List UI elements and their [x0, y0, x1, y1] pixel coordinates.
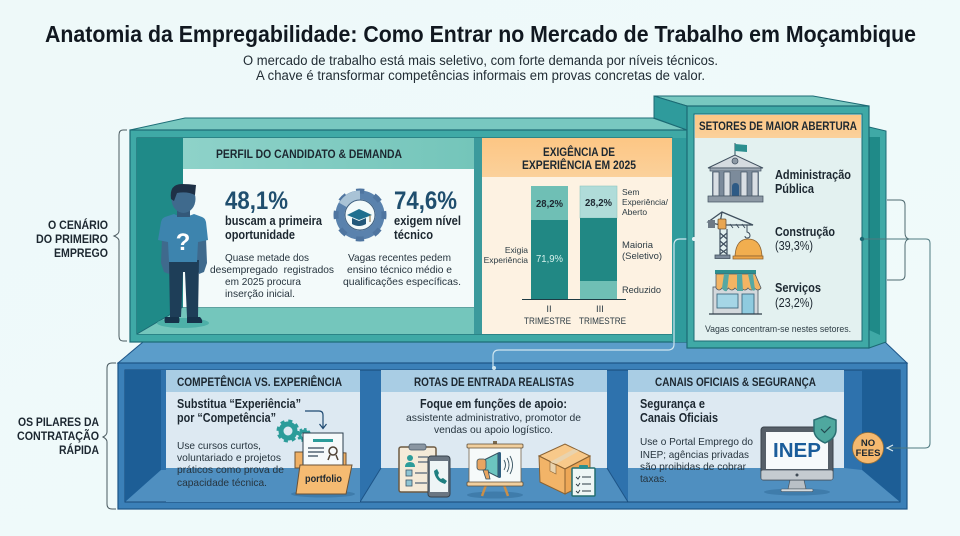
text: administração pública: Administração — [775, 168, 851, 182]
body text: vagas recentes: Vagas recentes pedem — [348, 252, 451, 264]
chart: stacked bars: TRIMESTRE — [579, 316, 626, 327]
heading: canais: CANAIS OFICIAIS & SEGURANÇA — [655, 377, 816, 389]
body text: quase metade — [210, 252, 334, 300]
panel: exigência de experiência — [474, 138, 672, 334]
chart: stacked bars: Experiência — [484, 255, 528, 265]
icon: gear with graduation cap — [336, 191, 384, 239]
subheading: segurança — [640, 397, 718, 425]
heading: exigência — [522, 146, 637, 172]
body text: vagas recentes: ensino técnico médio e — [347, 264, 452, 276]
chart: stacked bars: 71,9% — [536, 254, 563, 265]
stat: 74,6%: técnico — [394, 228, 433, 242]
icon: presentation board with megaphone — [467, 441, 523, 498]
caption: vagas concentram-se: Vagas concentram-se nestes setores. — [705, 324, 851, 335]
text: serviços — [775, 281, 821, 310]
body text: quase metade: desempregado registrados — [210, 264, 334, 276]
subheading: segurança: Canais Oficiais — [640, 411, 718, 425]
body text: portal emprego — [640, 436, 753, 485]
body text: cursos curtos: Use cursos curtos, — [177, 440, 261, 452]
subtitle: A chave é transformar competências informais em provas concretas de valor. — [256, 68, 705, 83]
body text: vagas recentes — [343, 252, 461, 288]
panel: setores de maior abertura — [654, 96, 886, 348]
subheading: substitua: Substitua “Experiência” — [177, 397, 301, 411]
panel: competência vs experiência — [166, 370, 360, 502]
body text: funções de apoio — [406, 412, 581, 436]
heading: perfil: PERFIL DO CANDIDATO & DEMANDA — [216, 149, 402, 161]
text: construção: Construção — [775, 225, 835, 239]
chart: stacked bars: Experiência/ — [622, 197, 669, 207]
icon: clipboard and phone — [399, 444, 450, 497]
text: administração pública: Pública — [775, 182, 815, 196]
body text: quase metade: em 2025 procura — [225, 276, 301, 288]
icon: cardboard box with checklist — [539, 444, 595, 496]
body text: cursos curtos: capacidade técnica. — [177, 477, 267, 489]
subtitle — [243, 53, 718, 83]
stat: 74,6%: 74,6% — [394, 187, 457, 215]
callout: no fees badge: NO — [861, 438, 875, 449]
subheading: substitua — [177, 397, 301, 425]
label: o cenário do primeiro emprego: O CENÁRIO — [48, 219, 108, 232]
stat: 74,6% — [394, 187, 461, 242]
chart: stacked bars: Reduzido — [622, 285, 661, 296]
body text: quase metade: Quase metade dos — [225, 252, 309, 264]
body text: quase metade: inserção inicial. — [225, 288, 295, 300]
stat: 48,1%: oportunidade — [225, 228, 295, 242]
heading: competência: COMPETÊNCIA VS. EXPERIÊNCIA — [177, 376, 342, 389]
body text: portal emprego: INEP; agências privadas — [640, 449, 749, 461]
label: os pilares da contratação rápida: OS PILARES DA — [18, 417, 99, 429]
icon: computer with INEP logo and shield — [761, 416, 836, 496]
callout: no fees badge — [852, 432, 884, 464]
body text: portal emprego: taxas. — [640, 473, 667, 485]
arrow: connector from sectors to rotas de entrada — [492, 239, 694, 370]
chart: stacked bars: III — [596, 304, 604, 315]
icon: construction crane and helmet — [708, 212, 763, 259]
stat: 48,1%: buscam a primeira — [225, 214, 323, 228]
icon: government building — [708, 143, 763, 202]
icon: computer with INEP logo and shield: INEP — [773, 440, 821, 462]
text: serviços: Serviços — [775, 281, 821, 295]
heading: setores: SETORES DE MAIOR ABERTURA — [699, 121, 857, 133]
stat: 48,1%: 48,1% — [225, 187, 288, 215]
subheading: foque: Foque em funções de apoio: — [420, 397, 567, 411]
panel: blue lower box — [118, 342, 907, 509]
heading: rotas: ROTAS DE ENTRADA REALISTAS — [414, 377, 574, 389]
panel: canais oficiais — [628, 370, 844, 496]
panel: teal upper box — [130, 118, 687, 342]
body text: cursos curtos: voluntariado e projetos — [177, 452, 281, 464]
body text: funções de apoio: assistente administrativo, promotor de — [406, 412, 581, 424]
text: construção — [775, 225, 835, 253]
icon: candidate silhouette — [157, 184, 209, 328]
subheading: substitua: por “Competência” — [177, 411, 276, 425]
label: os pilares da contratação rápida: CONTRATAÇÃO — [17, 430, 99, 443]
dot: connector start — [692, 237, 696, 241]
label: o cenário do primeiro emprego: EMPREGO — [54, 248, 108, 260]
label: o cenário do primeiro emprego — [36, 130, 127, 341]
text: administração pública — [775, 168, 851, 196]
panel: rotas de entrada — [381, 370, 607, 498]
chart: stacked bars: 28,2% — [585, 198, 612, 209]
text: construção: (39,3%) — [775, 239, 813, 253]
chart: stacked bars: 28,2% — [536, 199, 563, 210]
panel: perfil do candidato — [157, 138, 474, 328]
icon: candidate silhouette: ? — [176, 229, 190, 256]
chart: stacked bars: (Seletivo) — [622, 251, 662, 262]
icon: storefront — [709, 270, 762, 314]
text: serviços: (23,2%) — [775, 296, 813, 310]
title: Anatomia da Empregabilidade: Como Entrar no Mercado de Trabalho em Moçambique — [45, 21, 916, 47]
label: o cenário do primeiro emprego: DO PRIMEIRO — [36, 234, 108, 246]
icon: portfolio folder with gears — [278, 411, 355, 498]
stat: 48,1% — [225, 187, 323, 242]
label: os pilares da contratação rápida: RÁPIDA — [59, 444, 99, 457]
chart: stacked bars: Sem — [622, 187, 639, 197]
chart: stacked bars: Maioria — [622, 240, 654, 251]
label: os pilares da contratação rápida — [17, 363, 116, 509]
chart: stacked bars — [484, 186, 669, 327]
arrow: bracket and connector to no fees — [860, 200, 930, 451]
body text: cursos curtos: práticos como prova de — [177, 464, 284, 476]
heading: exigência: EXIGÊNCIA DE — [543, 146, 615, 159]
chart: stacked bars: Exigia — [505, 245, 528, 255]
icon: portfolio folder with gears: portfolio — [305, 473, 342, 485]
chart: stacked bars: Aberto — [622, 207, 647, 217]
body text: funções de apoio: vendas ou apoio logístico. — [434, 424, 553, 436]
chart: stacked bars: II — [546, 304, 552, 315]
stat: 74,6%: exigem nível — [394, 214, 461, 228]
body text: cursos curtos — [177, 440, 284, 489]
body text: vagas recentes: qualificações específicas. — [343, 276, 461, 288]
body text: portal emprego: Use o Portal Emprego do — [640, 436, 753, 448]
subheading: segurança: Segurança e — [640, 397, 705, 411]
callout: no fees badge: FEES — [856, 448, 880, 459]
subtitle: O mercado de trabalho está mais seletivo, com forte demanda por níveis técnicos. — [243, 53, 718, 68]
heading: exigência: EXPERIÊNCIA EM 2025 — [522, 159, 637, 172]
chart: stacked bars: TRIMESTRE — [524, 316, 571, 327]
body text: portal emprego: são proibidas de cobrar — [640, 461, 746, 473]
